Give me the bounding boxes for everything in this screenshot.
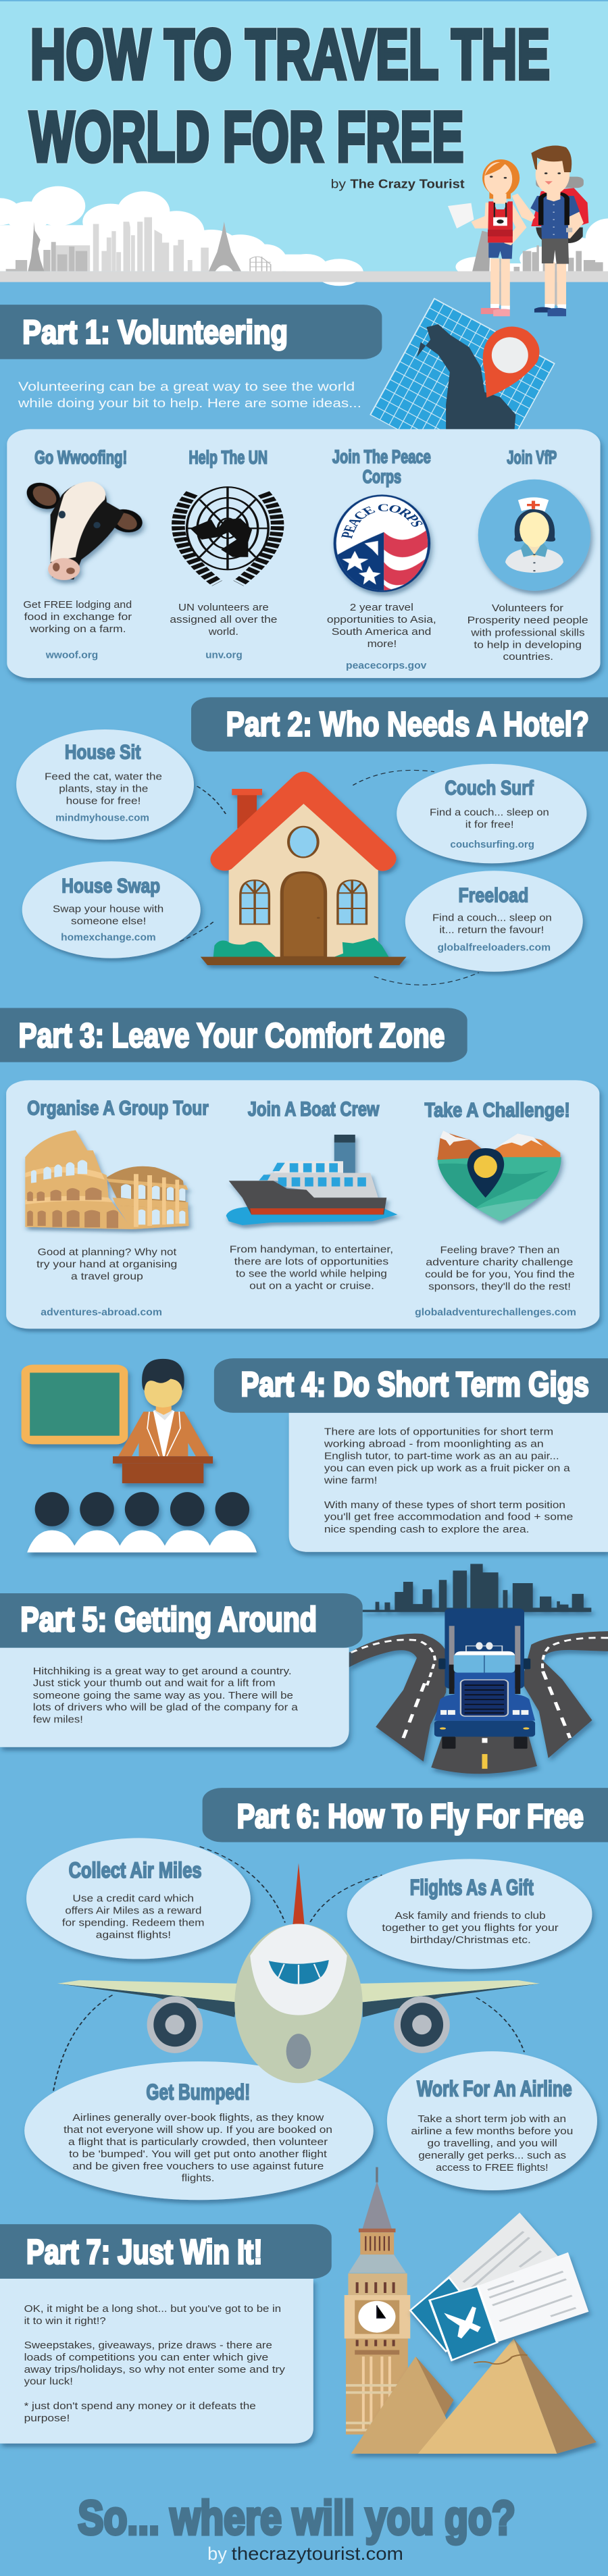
description: Good at planning? Why not (38, 1247, 176, 1258)
description: opportunities to Asia, (327, 615, 436, 625)
panel: getting around text: few miles! (33, 1714, 83, 1725)
left clouds (0, 186, 363, 286)
icon: mountain location badge (437, 1131, 561, 1225)
bubble: flights as a gift (347, 1859, 592, 1969)
description: From handyman, to entertainer, (230, 1244, 393, 1255)
description: assigned all over the (170, 615, 277, 625)
bubble: freeload: Freeload (458, 883, 528, 906)
truck (434, 1609, 535, 1749)
panel: short term gigs text: There are lots of opportunities for short term (324, 1426, 553, 1437)
panel: volunteering options (7, 429, 601, 678)
section: part 6 (24, 1788, 608, 2200)
bubble: flights as a gift: together to get you flights for your (382, 1922, 559, 1933)
column: take a challenge (415, 1098, 576, 1318)
bubble: freeload: it... return the favour! (439, 925, 544, 935)
statue of liberty (28, 222, 44, 272)
column: boat crew: Join A Boat Crew (248, 1098, 379, 1120)
link: unv.org (205, 650, 243, 661)
part 7 text panel: Sweepstakes, giveaways, prize draws - there are (24, 2340, 272, 2351)
bubble: get bumped (24, 2061, 374, 2200)
description (425, 1245, 575, 1292)
description: there are lots of opportunities (234, 1256, 388, 1267)
icon: colosseum (25, 1130, 189, 1229)
part 5 banner: Part 5: Getting Around (20, 1599, 317, 1639)
bubble: work for an airline: generally get perks... such as (418, 2150, 566, 2161)
description (467, 603, 588, 663)
description: try your hand at organising (36, 1259, 177, 1270)
right clouds (455, 218, 608, 277)
audience (27, 1492, 257, 1553)
bubble: house sit: Feed the cat, water the (45, 771, 162, 782)
panel: short term gigs text: wine farm! (324, 1474, 378, 1486)
bubble: house sit: House Sit (65, 741, 141, 763)
byline: by (331, 176, 347, 191)
description (23, 600, 132, 635)
part 6 banner (203, 1788, 608, 1843)
bubble: collect air miles: for spending. Redeem them (62, 1917, 204, 1928)
section: part 3 (0, 1008, 599, 1329)
section: part 1: Join The Peace (332, 446, 431, 467)
icon: nurse (478, 480, 590, 591)
part 2 banner (191, 697, 608, 752)
column: go wwoofing (20, 447, 149, 661)
panel: short term gigs text (289, 1413, 608, 1552)
right skyline (514, 245, 603, 272)
part 7 banner: Part 7: Just Win It! (26, 2232, 263, 2271)
section: part 3: Organise A Group Tour (27, 1096, 209, 1119)
description (36, 1247, 177, 1282)
panel: short term gigs text: working abroad - from moonlighting as an (324, 1438, 544, 1449)
intro text: while doing your bit to help. Here are some ideas... (18, 396, 361, 410)
description (327, 602, 436, 650)
bubble: house swap: someone else! (71, 916, 146, 927)
bubble: work for an airline (387, 2051, 597, 2190)
part 3 banner (0, 1008, 467, 1062)
plane tickets (410, 2213, 588, 2361)
bubble: get bumped: that not everyone will show up. If you are booked on (64, 2124, 332, 2135)
bubble: couch surf: Find a couch... sleep on (430, 807, 549, 818)
description: out on a yacht or cruise. (249, 1281, 374, 1291)
panel: getting around text: Just stick your thumb out and wait for a lift from (33, 1677, 276, 1689)
main title (30, 15, 550, 176)
teacher (113, 1359, 213, 1483)
sky (0, 1, 608, 272)
bubble: collect air miles: against flights! (96, 1929, 171, 1940)
part 7 text panel: your luck! (24, 2376, 73, 2388)
section: part 7 and footer (0, 2167, 597, 2564)
link: wwoof.org (45, 650, 98, 661)
bubble: work for an airline: go travelling, and you will (428, 2138, 557, 2148)
column: help the un: Help The UN (189, 447, 268, 468)
description: more! (368, 639, 397, 650)
eiffel tower (209, 222, 241, 272)
airplane illustration (57, 1863, 540, 2083)
intro text: Volunteering can be a great way to see the world (18, 380, 355, 394)
panel: comfort zone options (6, 1080, 599, 1329)
part 7 text panel: purpose! (24, 2413, 70, 2424)
bubble: collect air miles: Use a credit card which (72, 1892, 194, 1904)
description: Get FREE lodging and (23, 600, 132, 611)
icon: cow (20, 479, 149, 580)
description: a travel group (71, 1271, 143, 1282)
bubble: get bumped: and be given free vouchers to use against future (72, 2161, 324, 2171)
part 7 text panel: * just don't spend any money or it defeats the (24, 2401, 256, 2412)
bubble: collect air miles: offers Air Miles as a reward (65, 1905, 201, 1916)
description: to see the world while helping (236, 1268, 387, 1279)
bubble: house swap: Swap your house with (53, 904, 163, 915)
description: countries. (503, 652, 553, 663)
icon: peace corps logo (332, 494, 436, 598)
panel: getting around text: Hitchhiking is a great way to get around a country. (33, 1665, 292, 1676)
description: 2 year travel (350, 602, 413, 613)
blackboard (22, 1365, 128, 1444)
description (170, 602, 277, 638)
bubble: work for an airline: Take a short term job with an (417, 2113, 566, 2124)
icon: ship (226, 1135, 397, 1225)
description (230, 1244, 393, 1291)
byline (331, 176, 465, 191)
colosseum silhouette (250, 257, 271, 272)
bubble: house swap (22, 861, 201, 958)
intro text (18, 380, 361, 410)
pyramids (351, 2338, 597, 2454)
bubble: house swap: homexchange.com (61, 932, 156, 943)
bubble: get bumped: flights. (182, 2172, 214, 2184)
map illustration with pin (370, 299, 555, 480)
connector lines (53, 1847, 524, 2092)
tower of pisa (472, 231, 490, 272)
column: go wwoofing: Go Wwoofing! (34, 447, 127, 468)
bubble: house sit: house for free! (66, 796, 141, 806)
bubble: work for an airline: access to FREE flights! (436, 2162, 549, 2173)
description: Volunteers for (492, 603, 564, 614)
footer credit: thecrazytourist.com (232, 2544, 403, 2564)
bubble: freeload (405, 871, 583, 972)
column: boat crew (226, 1098, 397, 1291)
bubble: house sit: mindmyhouse.com (55, 813, 149, 823)
bubble: freeload: Find a couch... sleep on (432, 912, 552, 923)
footer credit: by (207, 2544, 227, 2564)
column: join vfp (467, 447, 590, 663)
icon: teacher at podium with audience (22, 1359, 257, 1553)
bubble: couch surf: couchsurfing.org (450, 839, 534, 850)
part 7 text panel: away trips/holidays, so why not enter some and try (24, 2364, 285, 2375)
bubble: house swap: House Swap (61, 875, 160, 897)
bubble: flights as a gift: Ask family and friends to club (395, 1909, 546, 1921)
panel: getting around text (0, 1648, 349, 1747)
column: group tour (25, 1096, 209, 1318)
left skyline (6, 217, 209, 272)
bubble: collect air miles (26, 1838, 251, 1959)
section: part 2 (16, 697, 608, 985)
bubble: get bumped: Get Bumped! (146, 2080, 250, 2104)
part 7 text panel (0, 2279, 313, 2444)
ground strip (0, 272, 608, 282)
house illustration (201, 771, 407, 965)
part 7 banner (0, 2224, 332, 2279)
panel: getting around text: lots of drivers who will be glad of the company for a (33, 1701, 298, 1713)
column: help the un (170, 447, 278, 661)
bubble: collect air miles: Collect Air Miles (69, 1858, 201, 1882)
footer credit (207, 2544, 403, 2564)
connector lines (178, 770, 479, 985)
bubble: couch surf: it for free! (465, 819, 514, 830)
byline: The Crazy Tourist (350, 176, 465, 191)
bubble: couch surf (397, 764, 586, 863)
column: peace corps: Corps (363, 466, 401, 487)
description: UN volunteers are (178, 602, 269, 613)
panel: getting around text: someone going the same way as you. There will be (33, 1689, 293, 1701)
travellers: woman (448, 159, 526, 316)
description: working on a farm. (29, 624, 126, 635)
bubble: house sit (16, 729, 194, 840)
city skyline (363, 1564, 591, 1612)
part 5 banner (0, 1593, 363, 1648)
bubble: get bumped: a flight that is particularly crowded, then volunteer (68, 2136, 328, 2147)
bubble: house sit: plants, stay in the (59, 783, 148, 794)
section: part 1 (0, 298, 605, 684)
description: South America and (332, 627, 431, 638)
part 1 banner: Part 1: Volunteering (22, 313, 288, 351)
part 4 banner (214, 1358, 608, 1413)
big ben tower (345, 2167, 410, 2434)
travellers: man (512, 146, 588, 316)
header section (0, 1, 608, 316)
column: peace corps (327, 446, 436, 671)
roads (349, 1631, 608, 1774)
icon: peace corps logo: PEACE CORPS (341, 504, 423, 539)
part 1 banner (0, 305, 382, 359)
link: peacecorps.gov (346, 661, 427, 671)
part 7 text panel: it to win it right!? (24, 2315, 106, 2327)
bubble: get bumped: Airlines generally over-book flights, as they know (72, 2112, 324, 2123)
part 7 text panel: OK, it might be a long shot... but you've got to be in (24, 2304, 281, 2315)
bubble: get bumped: to be 'bumped'. You will get put onto another flight (69, 2148, 328, 2159)
link: adventures-abroad.com (41, 1307, 162, 1318)
panel: short term gigs text: nice spending cash to explore the area. (324, 1523, 530, 1535)
description: world. (208, 627, 238, 638)
description: food in exchange for (24, 612, 132, 623)
bubble: flights as a gift: birthday/Christmas etc. (410, 1934, 531, 1945)
icon: un emblem (178, 487, 278, 584)
section: parts 4 and 5 (0, 1358, 608, 1774)
part 7 text panel: loads of competitions you can enter which give (24, 2352, 268, 2363)
